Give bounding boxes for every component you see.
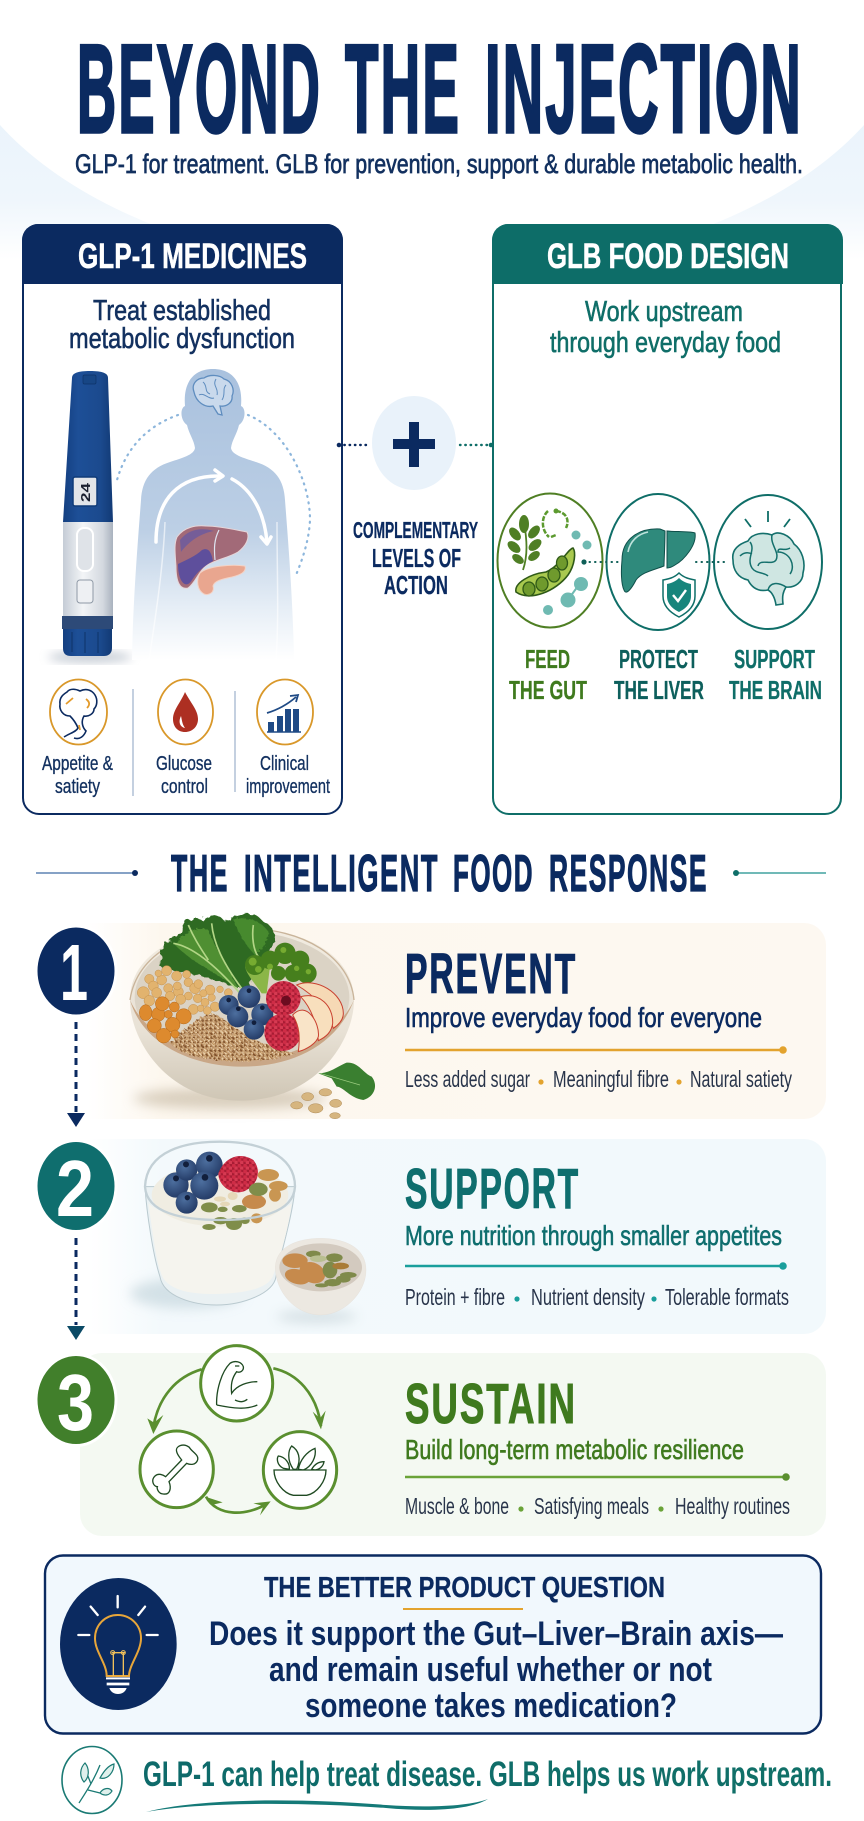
background: top header wash (0, 0, 864, 275)
section heading (171, 845, 708, 903)
attributes: Healthy routines (675, 1493, 790, 1519)
section heading: THE (171, 845, 229, 903)
chickpeas (137, 966, 232, 1015)
cycle arrows (147, 1368, 326, 1515)
connector dots (339, 444, 491, 446)
step 3: sustain (36, 1346, 826, 1536)
step number (36, 1354, 116, 1447)
dotted circulation arcs (117, 415, 310, 575)
panel description: through everyday food (550, 327, 781, 359)
small nut bowl (275, 1238, 366, 1315)
step number: 3 (57, 1358, 94, 1447)
broccoli (245, 967, 270, 993)
bone (140, 1431, 213, 1508)
liver (175, 526, 248, 588)
underline swoosh (146, 1799, 488, 1812)
icon: support the brain (714, 495, 822, 629)
accent rule (403, 1608, 523, 1610)
step 1: prevent (36, 914, 826, 1127)
rule (405, 1262, 787, 1270)
attributes: Muscle & bone (405, 1493, 509, 1519)
complementary label: ACTION (384, 570, 448, 600)
row background (88, 1139, 826, 1334)
icon: light bulb (60, 1578, 177, 1710)
attributes: Tolerable formats (665, 1284, 789, 1310)
tagline: Improve everyday food for everyone (405, 1002, 762, 1033)
panel description: Work upstream (585, 296, 743, 328)
complementary label: LEVELS OF (372, 543, 461, 573)
callout heading: THE BETTER PRODUCT QUESTION (264, 1572, 665, 1604)
icon: muscle, bone, meal cycle (140, 1346, 337, 1515)
section heading: INTELLIGENT (244, 845, 439, 903)
meal bowl (263, 1432, 337, 1508)
step number: 1 (60, 928, 88, 1017)
complementary label: COMPLEMENTARY (353, 517, 478, 543)
pillar labels: FEED (525, 644, 570, 674)
effect labels: Appetite & (42, 752, 113, 775)
section heading: RESPONSE (549, 845, 708, 903)
plus connector (337, 396, 493, 490)
quinoa (171, 1014, 295, 1061)
question: and remain useful whether or not (269, 1651, 712, 1689)
circulation arrows (156, 470, 271, 544)
icon: injection pen (48, 371, 132, 662)
food photo: grain and berry bowl (130, 914, 375, 1119)
raspberries (264, 981, 301, 1051)
tagline: Build long-term metabolic resilience (405, 1434, 744, 1465)
panel description: metabolic dysfunction (69, 323, 295, 355)
heading: prevent: PREVENT (405, 942, 577, 1006)
greens (160, 914, 275, 990)
rule (405, 1473, 790, 1481)
title: BEYOND (77, 20, 322, 159)
blueberries (219, 985, 273, 1040)
attributes: Less added sugar (405, 1066, 530, 1092)
heading: support: SUPPORT (405, 1157, 580, 1221)
attributes: Satisfying meals (534, 1493, 649, 1519)
panel: GLB food design (492, 224, 843, 814)
pillar labels: PROTECT (619, 644, 698, 674)
step 2: support (36, 1139, 826, 1340)
callout: the better product question (45, 1556, 821, 1734)
effect icons row (42, 680, 330, 798)
heading: sustain: SUSTAIN (405, 1372, 577, 1436)
body shape (132, 369, 294, 660)
icon: appetite and satiety (50, 680, 107, 744)
section heading: FOOD (453, 845, 534, 903)
panel description (550, 296, 781, 359)
effect labels: Glucose (156, 752, 212, 775)
attributes: Protein + fibre (405, 1284, 505, 1310)
panel description: Treat established (93, 295, 271, 327)
icon: leaf sprig (62, 1746, 122, 1814)
attributes (405, 1066, 792, 1092)
heading: GLP-1 medicines: GLP-1 MEDICINES (78, 237, 307, 276)
step number (36, 926, 116, 1017)
body silhouette with liver and pancreas (117, 369, 310, 660)
icon: injection pen: 24 (78, 482, 93, 502)
spinach leaf and oats (318, 1063, 375, 1100)
effect labels: satiety (55, 775, 101, 798)
section heading rules (36, 870, 826, 876)
panel description (69, 295, 295, 355)
panel header: GLP-1 (22, 224, 343, 284)
panel header: GLB (492, 224, 843, 284)
divider (133, 689, 235, 796)
effect labels: control (161, 775, 208, 798)
brain in head (193, 375, 233, 415)
apple slices (297, 983, 343, 1028)
effect labels: improvement (246, 775, 330, 798)
step number (36, 1140, 116, 1233)
muscle (201, 1346, 273, 1421)
attributes: Meaningful fibre (553, 1066, 669, 1092)
question (209, 1615, 783, 1725)
attributes (405, 1284, 789, 1310)
row background (80, 1353, 826, 1536)
dashed arrow (67, 1238, 85, 1340)
pillar labels: SUPPORT (734, 644, 815, 674)
icon: feed the gut (498, 494, 602, 628)
pillar labels: THE LIVER (614, 675, 704, 705)
dashed arrow (67, 1022, 85, 1127)
attributes: Nutrient density (531, 1284, 645, 1310)
step number: 2 (56, 1144, 94, 1233)
footer (62, 1746, 832, 1814)
attributes: Natural satiety (690, 1066, 792, 1092)
rule (405, 1046, 787, 1054)
plus icon (372, 396, 456, 490)
icon: glucose drop (158, 680, 213, 744)
complementary label (353, 517, 478, 600)
question: someone takes medication? (305, 1687, 677, 1725)
pillar labels: THE GUT (509, 675, 587, 705)
icon: clinical improvement chart (257, 680, 313, 744)
title: THE (345, 20, 461, 159)
row background (88, 923, 826, 1119)
pillar labels (509, 644, 822, 705)
pancreas (198, 565, 245, 595)
effect labels (42, 752, 330, 798)
attributes (405, 1493, 790, 1519)
icon: protect the liver (606, 494, 710, 630)
axis dots (584, 561, 724, 563)
food photo: yogurt glass (130, 1142, 366, 1323)
effect labels: Clinical (260, 752, 309, 775)
